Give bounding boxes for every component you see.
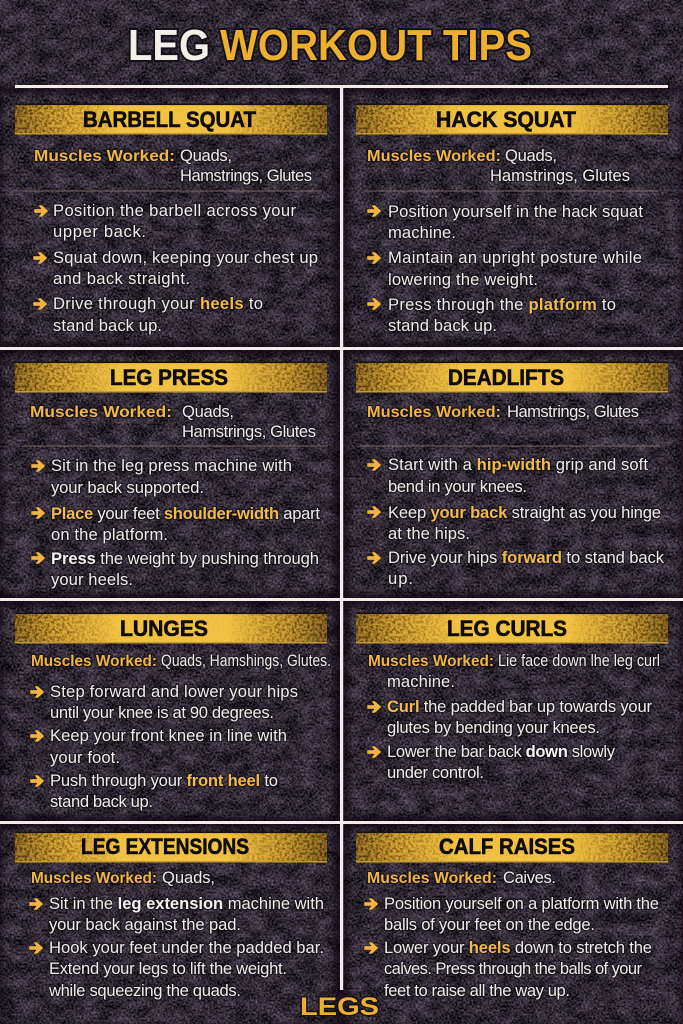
steps: hack squat: Position yourself in the hack squat <box>388 202 643 221</box>
header: lunges: LUNGES <box>120 616 208 641</box>
footer label: legs: LEGS <box>300 993 379 1021</box>
steps: barbell squat: Drive through your heels to <box>53 294 263 313</box>
steps: deadlifts: Drive your hips forward to stand back <box>388 548 665 567</box>
steps: calf raises: Position yourself on a platform with the <box>384 894 659 913</box>
header: leg curls: LEG CURLS <box>447 616 567 641</box>
muscles worked: leg press: Hamstrings, Glutes <box>182 422 316 441</box>
muscles worked: leg curls: Muscles Worked: <box>368 653 494 670</box>
steps: hack squat: Press through the platform to <box>388 295 616 314</box>
muscles worked: lunges: Quads, Hamshings, Glutes. <box>161 651 331 670</box>
steps: leg extensions: Sit in the leg extension machine with <box>49 894 324 913</box>
steps: leg press <box>31 456 320 589</box>
title: LEG <box>128 21 210 70</box>
muscles worked: leg press <box>30 402 316 441</box>
muscles worked: barbell squat: Quads, <box>180 146 232 165</box>
steps: calf raises <box>364 894 659 1000</box>
muscles worked: deadlifts: Muscles Worked: <box>367 404 501 421</box>
steps: hack squat: machine. <box>388 223 456 242</box>
steps: hack squat: stand back up. <box>388 316 497 335</box>
steps: leg press: Sit in the leg press machine with <box>51 456 292 475</box>
steps: leg curls: glutes by bending your knees. <box>387 718 600 737</box>
muscles worked: leg press: Muscles Worked: <box>30 404 172 421</box>
steps: leg press: Place your feet shoulder-width apart <box>51 504 320 523</box>
panel: lunges <box>15 612 331 811</box>
steps: barbell squat: Position the barbell across your <box>53 201 296 220</box>
header: deadlifts: DEADLIFTS <box>448 365 564 390</box>
muscles worked: leg extensions: Quads, <box>162 868 215 887</box>
muscles worked: hack squat: Quads, <box>505 146 557 165</box>
header: barbell squat <box>15 104 327 134</box>
steps: lunges: Push through your front heel to <box>50 771 278 790</box>
muscles worked: leg extensions: Muscles Worked: <box>31 870 157 887</box>
steps: deadlifts: Start with a hip-width grip and soft <box>388 455 648 474</box>
muscles worked: deadlifts: Hamstrings, Glutes <box>507 402 639 421</box>
muscles worked: leg press: Quads, <box>182 402 234 421</box>
steps: leg extensions: Hook your feet under the padded bar. <box>49 938 324 957</box>
panel: leg press <box>15 362 328 589</box>
muscles worked: barbell squat: Muscles Worked: <box>34 148 175 165</box>
steps: leg extensions <box>29 894 324 1000</box>
steps: calf raises: Lower your heels down to stretch the <box>384 938 652 957</box>
steps: leg curls <box>367 697 652 782</box>
steps: leg curls: under control. <box>387 763 484 782</box>
steps: leg extensions: your back against the pad. <box>49 915 241 934</box>
steps: leg curls: Curl the padded bar up towards your <box>387 697 652 716</box>
muscles worked: leg curls <box>368 651 660 691</box>
muscles worked: hack squat <box>367 146 630 185</box>
steps: lunges: Step forward and lower your hips <box>50 682 298 701</box>
muscles worked: leg curls: Lie face down lhe leg curl <box>498 651 660 670</box>
steps: deadlifts: at the hips. <box>388 524 470 543</box>
panel: calf raises <box>356 832 668 1000</box>
panel: deadlifts <box>356 362 668 588</box>
steps: hack squat <box>367 202 643 335</box>
steps: lunges: stand back up. <box>50 792 153 811</box>
steps: lunges: your foot. <box>50 748 120 767</box>
panel: barbell squat <box>15 104 327 335</box>
muscles worked: deadlifts <box>367 402 639 421</box>
header: leg press <box>15 362 327 392</box>
header: hack squat: HACK SQUAT <box>436 107 577 132</box>
muscles worked: lunges <box>31 651 331 670</box>
muscles worked: calf raises: Muscles Worked: <box>367 870 497 887</box>
muscles worked: lunges: Muscles Worked: <box>31 653 157 670</box>
header: deadlifts <box>356 362 668 392</box>
panel: leg extensions <box>15 832 327 1000</box>
muscles worked: calf raises: Caives. <box>503 868 556 887</box>
header: lunges <box>15 612 327 644</box>
muscles worked: calf raises <box>367 868 556 887</box>
steps: hack squat: lowering the weight. <box>388 270 538 289</box>
header: calf raises <box>356 832 668 862</box>
steps: calf raises: balls of your feet on the edge. <box>384 915 595 934</box>
muscles worked: barbell squat <box>34 146 312 185</box>
steps: calf raises: feet to raise all the way up. <box>384 981 570 1000</box>
steps: barbell squat <box>33 201 318 335</box>
title: WORKOUT TIPS <box>220 21 532 70</box>
steps: barbell squat: stand back up. <box>53 316 162 335</box>
header: barbell squat: BARBELL SQUAT <box>83 107 257 132</box>
steps: leg press: your back supported. <box>51 478 204 497</box>
steps: barbell squat: upper back. <box>53 222 146 241</box>
muscles worked: barbell squat: Hamstrings, Glutes <box>180 166 312 185</box>
steps: barbell squat: Squat down, keeping your chest up <box>53 248 318 267</box>
steps: leg press: your heels. <box>51 570 133 589</box>
steps: deadlifts: bend in your knees. <box>388 477 527 496</box>
steps: leg extensions: Extend your legs to lift the weight. <box>49 959 287 978</box>
steps: deadlifts <box>367 455 665 588</box>
header: leg extensions: LEG EXTENSIONS <box>81 834 249 859</box>
header: leg extensions <box>15 832 327 862</box>
muscles worked: hack squat: Muscles Worked: <box>367 148 501 165</box>
steps: leg press: Press the weight by pushing through <box>51 549 319 568</box>
header: leg curls <box>356 612 668 644</box>
panel: hack squat <box>356 104 668 335</box>
steps: lunges: Keep your front knee in line with <box>50 726 287 745</box>
header: hack squat <box>356 104 668 134</box>
steps: barbell squat: and back straight. <box>53 269 190 288</box>
muscles worked: leg extensions <box>31 868 215 887</box>
steps: deadlifts: up. <box>388 569 413 588</box>
header: calf raises: CALF RAISES <box>439 834 575 859</box>
steps: lunges: until your knee is at 90 degrees. <box>50 703 274 722</box>
steps: calf raises: calves. Press through the balls of your <box>384 959 642 978</box>
steps: leg extensions: while squeezing the quads. <box>48 981 241 1000</box>
steps: leg curls: Lower the bar back down slowly <box>387 742 616 761</box>
steps: leg press: on the platform. <box>51 525 168 544</box>
steps: lunges <box>30 682 298 811</box>
muscles worked: leg curls: machine. <box>387 672 455 691</box>
steps: deadlifts: Keep your back straight as you hinge <box>388 503 661 522</box>
muscles worked: hack squat: Hamstrings, Glutes <box>490 166 630 185</box>
panel: leg curls <box>356 612 668 782</box>
header: leg press: LEG PRESS <box>110 365 228 390</box>
steps: hack squat: Maintain an upright posture while <box>388 248 642 267</box>
